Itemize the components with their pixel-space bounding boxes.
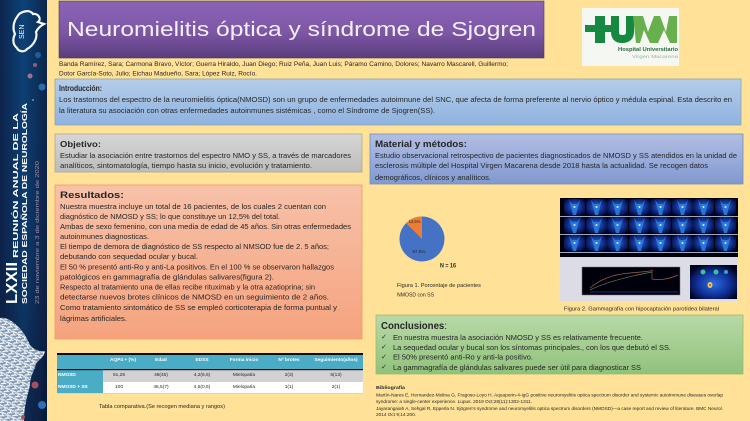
authors: Banda Ramírez, Sara; Carmona Bravo, Víctor; Guerra Hiraldo, Juan Diego; Ruiz Peña, Juan Luis; Páramo Camino, Dolores; Navarro Mascarell, Guillermo; xyxy=(59,61,508,68)
panel: material y métodos: esclerosis múltiple del Hospital Virgen Macarena desde 2018 hasta la actualidad. Se recogen datos xyxy=(375,161,708,170)
comparison table: 4,2(6,5) xyxy=(194,372,211,378)
panel: resultados: Resultados: xyxy=(60,190,124,201)
panel: material y métodos xyxy=(370,134,743,184)
panel: objetivo: Objetivo: xyxy=(60,139,101,149)
time-activity graph xyxy=(582,267,680,295)
panel: introducción: Introducción: xyxy=(59,84,102,93)
comparison table: Mielopatía xyxy=(233,384,255,390)
panel: material y métodos: demográficos, clínicos y analíticos. xyxy=(375,173,491,182)
panel: resultados: El 50 % presentó anti-Ro y anti-La positivos. En el 100 % se observaron hallazgos xyxy=(60,262,334,272)
comparison table: 2(1) xyxy=(332,384,341,390)
panel: resultados: patológicos en gammagrafía de glándulas salivares(figura 2). xyxy=(60,272,274,282)
panel: introducción xyxy=(55,79,741,125)
panel: resultados: debutando con sequedad ocular y bucal. xyxy=(60,252,198,261)
panel: resultados: diagnóstico de NMOSD y SS; lo que constituye un 12,5% del total. xyxy=(60,212,280,221)
panel: conclusiones xyxy=(376,315,743,374)
comparison table: 4,5(0,5) xyxy=(194,384,211,390)
icon: SEN logo: SEN xyxy=(19,25,26,39)
comparison table: Seguimiento(años) xyxy=(314,357,358,363)
pie chart: porcentaje de pacientes: 87,5% xyxy=(412,249,426,254)
comparison table: NMOSD + SS xyxy=(58,384,89,390)
congress title text: REUNIÓN ANUAL DE LA xyxy=(11,112,20,258)
congress title text: 23 de noviembre a 3 de diciembre de 2020 xyxy=(35,161,41,304)
panel: resultados: autoinmunes diagnosticas. xyxy=(60,232,149,241)
caption: figura 1 xyxy=(397,283,481,298)
panel: resultados: Respecto al tratamiento una de ellas recibe rituximab y la otra azatioprina; sin xyxy=(60,282,315,292)
bibliography: Martín-Nares E, Hernandez-Molina G, Fragoso-Loyo H. Aquaporin-4-IgG positive neuromyelitis optica spectrum disorder and systemic autoimmune diseases overlap xyxy=(376,392,723,398)
panel: resultados: Como tratamiento sintomático de SS se empleó corticoterapia de forma puntual y xyxy=(60,303,337,312)
congress title text: LXXII xyxy=(4,262,21,304)
figure: gammagrafía xyxy=(560,198,738,301)
panel: resultados: lágrimas artificiales. xyxy=(60,314,127,323)
panel: material y métodos: Material y métodos: xyxy=(375,139,467,149)
caption: tabla comparativa: Tabla comparativa.(Se recogen mediana y rangos) xyxy=(99,404,225,410)
comparison table: 51,25 xyxy=(113,372,125,378)
title banner: Neuromielitis óptica y síndrome de Sjogren xyxy=(67,18,536,41)
panel: objetivo: analíticos, sintomatología, tiempo hasta su inicio, evolución y tratamiento. xyxy=(60,161,312,170)
panel: resultados: Nuestra muestra incluye un total de 16 pacientes, de los cuales 2 cuentan con xyxy=(60,202,326,211)
logo: Hospital Universitario Virgen Macarena: Hospital Universitario xyxy=(618,47,678,53)
panel: material y métodos: Estudio observacional retrospectivo de pacientes diagnosticados de NMOSD y SS atendidos en la unidad de xyxy=(375,151,737,160)
panel: resultados xyxy=(55,185,362,339)
panel: resultados: Ambas de sexo femenino, con una media de edad de 45 años. Sin otras enfermedades xyxy=(60,222,351,231)
bibliography: Jayarangaiah A, Sehgal R, Epperla N. Sjögren's syndrome and neuromyelitis optica spectrum disorders (NMOSD)—a case report and review of literature. BMC Neurol. xyxy=(376,406,723,411)
comparison table: 46,5(7) xyxy=(153,384,169,390)
icon: SEN logo xyxy=(13,11,44,51)
panel: conclusiones: ✓ xyxy=(381,364,387,371)
panel: introducción: la literatura su asociación con otras enfermedades autoinmunes sistémicas , como el Síndrome de Sjogren(SS). xyxy=(59,108,435,115)
panel: objetivo xyxy=(55,134,362,172)
pie chart: porcentaje de pacientes xyxy=(400,216,444,262)
comparison table: Forma inicio xyxy=(230,357,258,363)
caption: figura 1: Figura 1. Porcentaje de pacientes xyxy=(397,283,481,289)
caption: figura 1: NMOSD con SS xyxy=(397,292,434,298)
bibliography: syndrome: a single-center experience. Lupus. 2019 Oct;28(11):1302-1311. xyxy=(376,399,532,404)
panel: introducción: Los trastornos del espectro de la neuromielitis óptica(NMOSD) son un grupo de enfermedades autoimnune del SNC, que afecta de forma preferente al nervio óptico y médula espinal. Esta descrito en xyxy=(59,97,732,104)
logo: Hospital Universitario Virgen Macarena: Virgen Macarena xyxy=(632,54,678,60)
comparison table xyxy=(57,353,363,394)
authors: Dotor García-Soto, Julio; Eichau Madueño, Sara; López Ruiz, Rocío. xyxy=(59,70,257,78)
comparison table: 2(3) xyxy=(285,372,294,378)
illustration: brain xyxy=(0,318,46,421)
comparison table: Nº brotes xyxy=(278,357,300,363)
pie chart: porcentaje de pacientes: 12,5% xyxy=(409,219,421,224)
panel: conclusiones: La sequedad ocular y bucal son los síntomas principales., con los que debutó el SS. xyxy=(393,343,671,352)
bibliography: 2014 Oct 9;14:200. xyxy=(376,412,416,417)
panel: conclusiones: ✓ xyxy=(381,354,387,361)
panel: resultados: El tiempo de demora de diagnóstico de SS respecto al NMSOD fue de 2. 5 años; xyxy=(60,242,329,251)
comparison table: Mielopatía xyxy=(233,372,255,378)
comparison table: 48(45) xyxy=(154,372,168,378)
bibliography xyxy=(376,385,723,417)
caption: figura 2: Figura 2. Gammagrafía con hipocaptación parotídea bilateral xyxy=(564,306,719,312)
comparison table: 5(13) xyxy=(330,372,342,378)
congress title text: SOCIEDAD ESPAÑOLA DE NEUROLOGÍA xyxy=(20,102,29,304)
title banner xyxy=(59,1,544,58)
decorative network dots xyxy=(28,52,46,101)
scan image: salivary glands xyxy=(690,265,737,299)
scan tile grid xyxy=(560,199,738,253)
logo: Hospital Universitario Virgen Macarena xyxy=(582,8,679,66)
panel: conclusiones: ✓ xyxy=(381,344,387,351)
comparison table: Edad xyxy=(155,357,167,363)
comparison table: AQP4 + (%) xyxy=(110,357,136,363)
panel: conclusiones: Conclusiones: xyxy=(381,321,447,332)
sidebar: congress banner xyxy=(0,0,47,421)
bibliography: Bibliografía xyxy=(376,385,405,390)
panel: objetivo: Estudiar la asociación entre trastornos del espectro NMO y SS, a través de marcadores xyxy=(60,151,351,160)
label: N = 16: N = 16 xyxy=(440,264,457,270)
congress title text xyxy=(4,102,41,304)
panel: resultados: detectarse nuevos brotes clínicos de NMOSD en un seguimiento de 2 años. xyxy=(60,292,329,302)
comparison table: 100 xyxy=(115,384,123,390)
comparison table: EDSS xyxy=(195,357,209,363)
comparison table: 1(1) xyxy=(285,384,294,390)
panel: conclusiones: ✓ xyxy=(381,334,387,341)
comparison table: NMOSD xyxy=(58,372,76,378)
authors xyxy=(59,61,508,78)
panel: conclusiones: La gammagrafía de glándulas salivares puede ser útil para diagnosticar SS xyxy=(393,363,641,372)
panel: conclusiones: El 50% presentó anti-Ro y anti-la positivo. xyxy=(393,352,533,362)
panel: conclusiones: En nuestra muestra la asociación NMOSD y SS es relativamente frecuente. xyxy=(393,333,643,342)
